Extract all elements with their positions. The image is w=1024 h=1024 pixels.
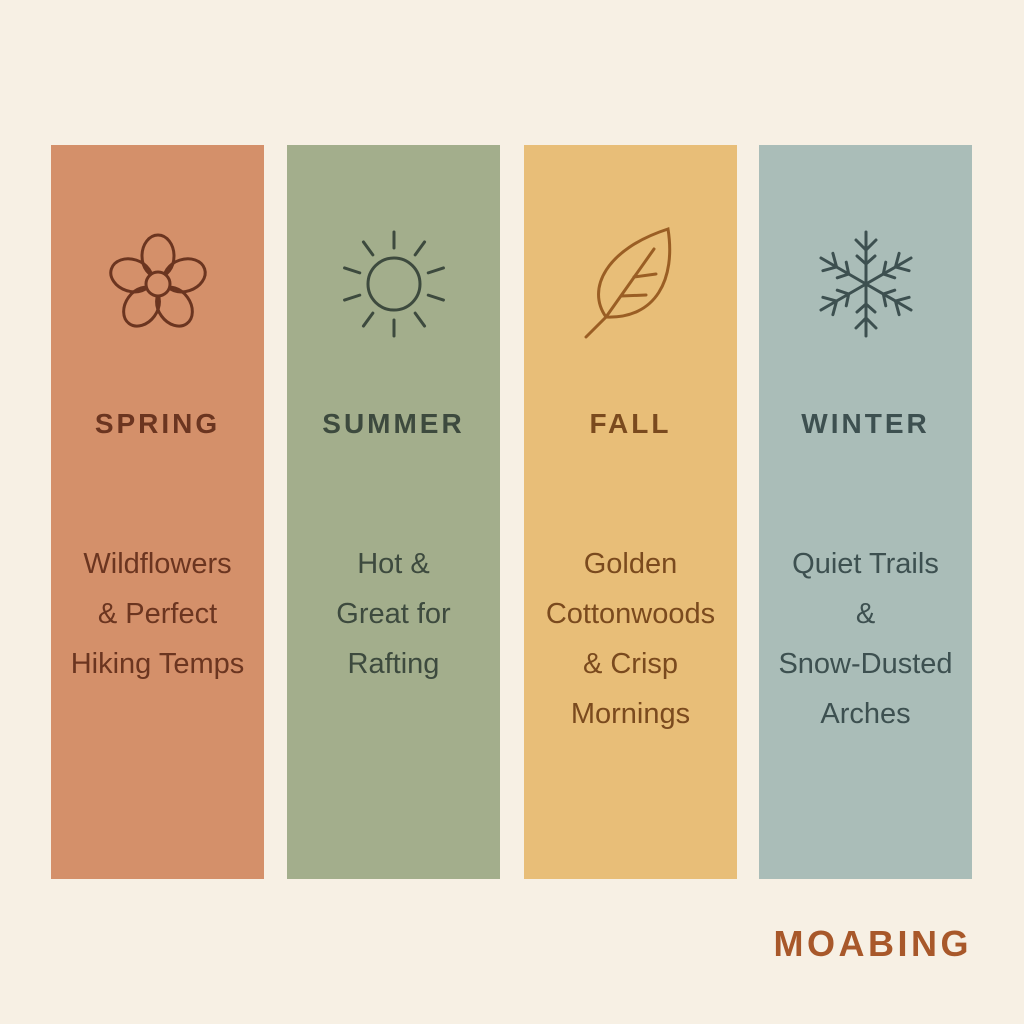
heading: fall: FALL xyxy=(590,408,672,439)
text: fall: Mornings xyxy=(571,698,690,730)
text: fall xyxy=(546,548,715,730)
text: spring: Hiking Temps xyxy=(71,648,244,680)
icon: snowflake xyxy=(819,230,913,338)
text: fall: Cottonwoods xyxy=(546,598,715,630)
text: spring xyxy=(71,548,244,680)
text: winter: Quiet Trails xyxy=(792,548,939,580)
text: summer: Hot & xyxy=(357,548,430,580)
heading: summer: SUMMER xyxy=(322,408,465,439)
panel: winter xyxy=(759,145,972,879)
text: summer: Rafting xyxy=(348,648,439,680)
text: winter: Arches xyxy=(820,698,911,730)
panel: fall xyxy=(524,145,737,879)
icon: leaf xyxy=(584,227,672,338)
icon: flower xyxy=(109,234,207,328)
panel: summer xyxy=(287,145,500,879)
text: fall: Golden xyxy=(584,548,677,580)
panel: spring xyxy=(51,145,264,879)
heading: spring: SPRING xyxy=(95,408,220,439)
text: summer xyxy=(336,548,451,680)
text: spring: Wildflowers xyxy=(83,548,232,580)
text: winter: & xyxy=(856,598,875,630)
brand: MOABING: MOABING xyxy=(774,923,972,964)
text: fall: & Crisp xyxy=(583,648,678,680)
heading: winter: WINTER xyxy=(801,408,930,439)
icon: sun xyxy=(343,230,445,338)
text: spring: & Perfect xyxy=(98,598,217,630)
text: summer: Great for xyxy=(336,598,451,630)
text: winter: Snow-Dusted xyxy=(778,648,953,680)
text: winter xyxy=(778,548,953,730)
